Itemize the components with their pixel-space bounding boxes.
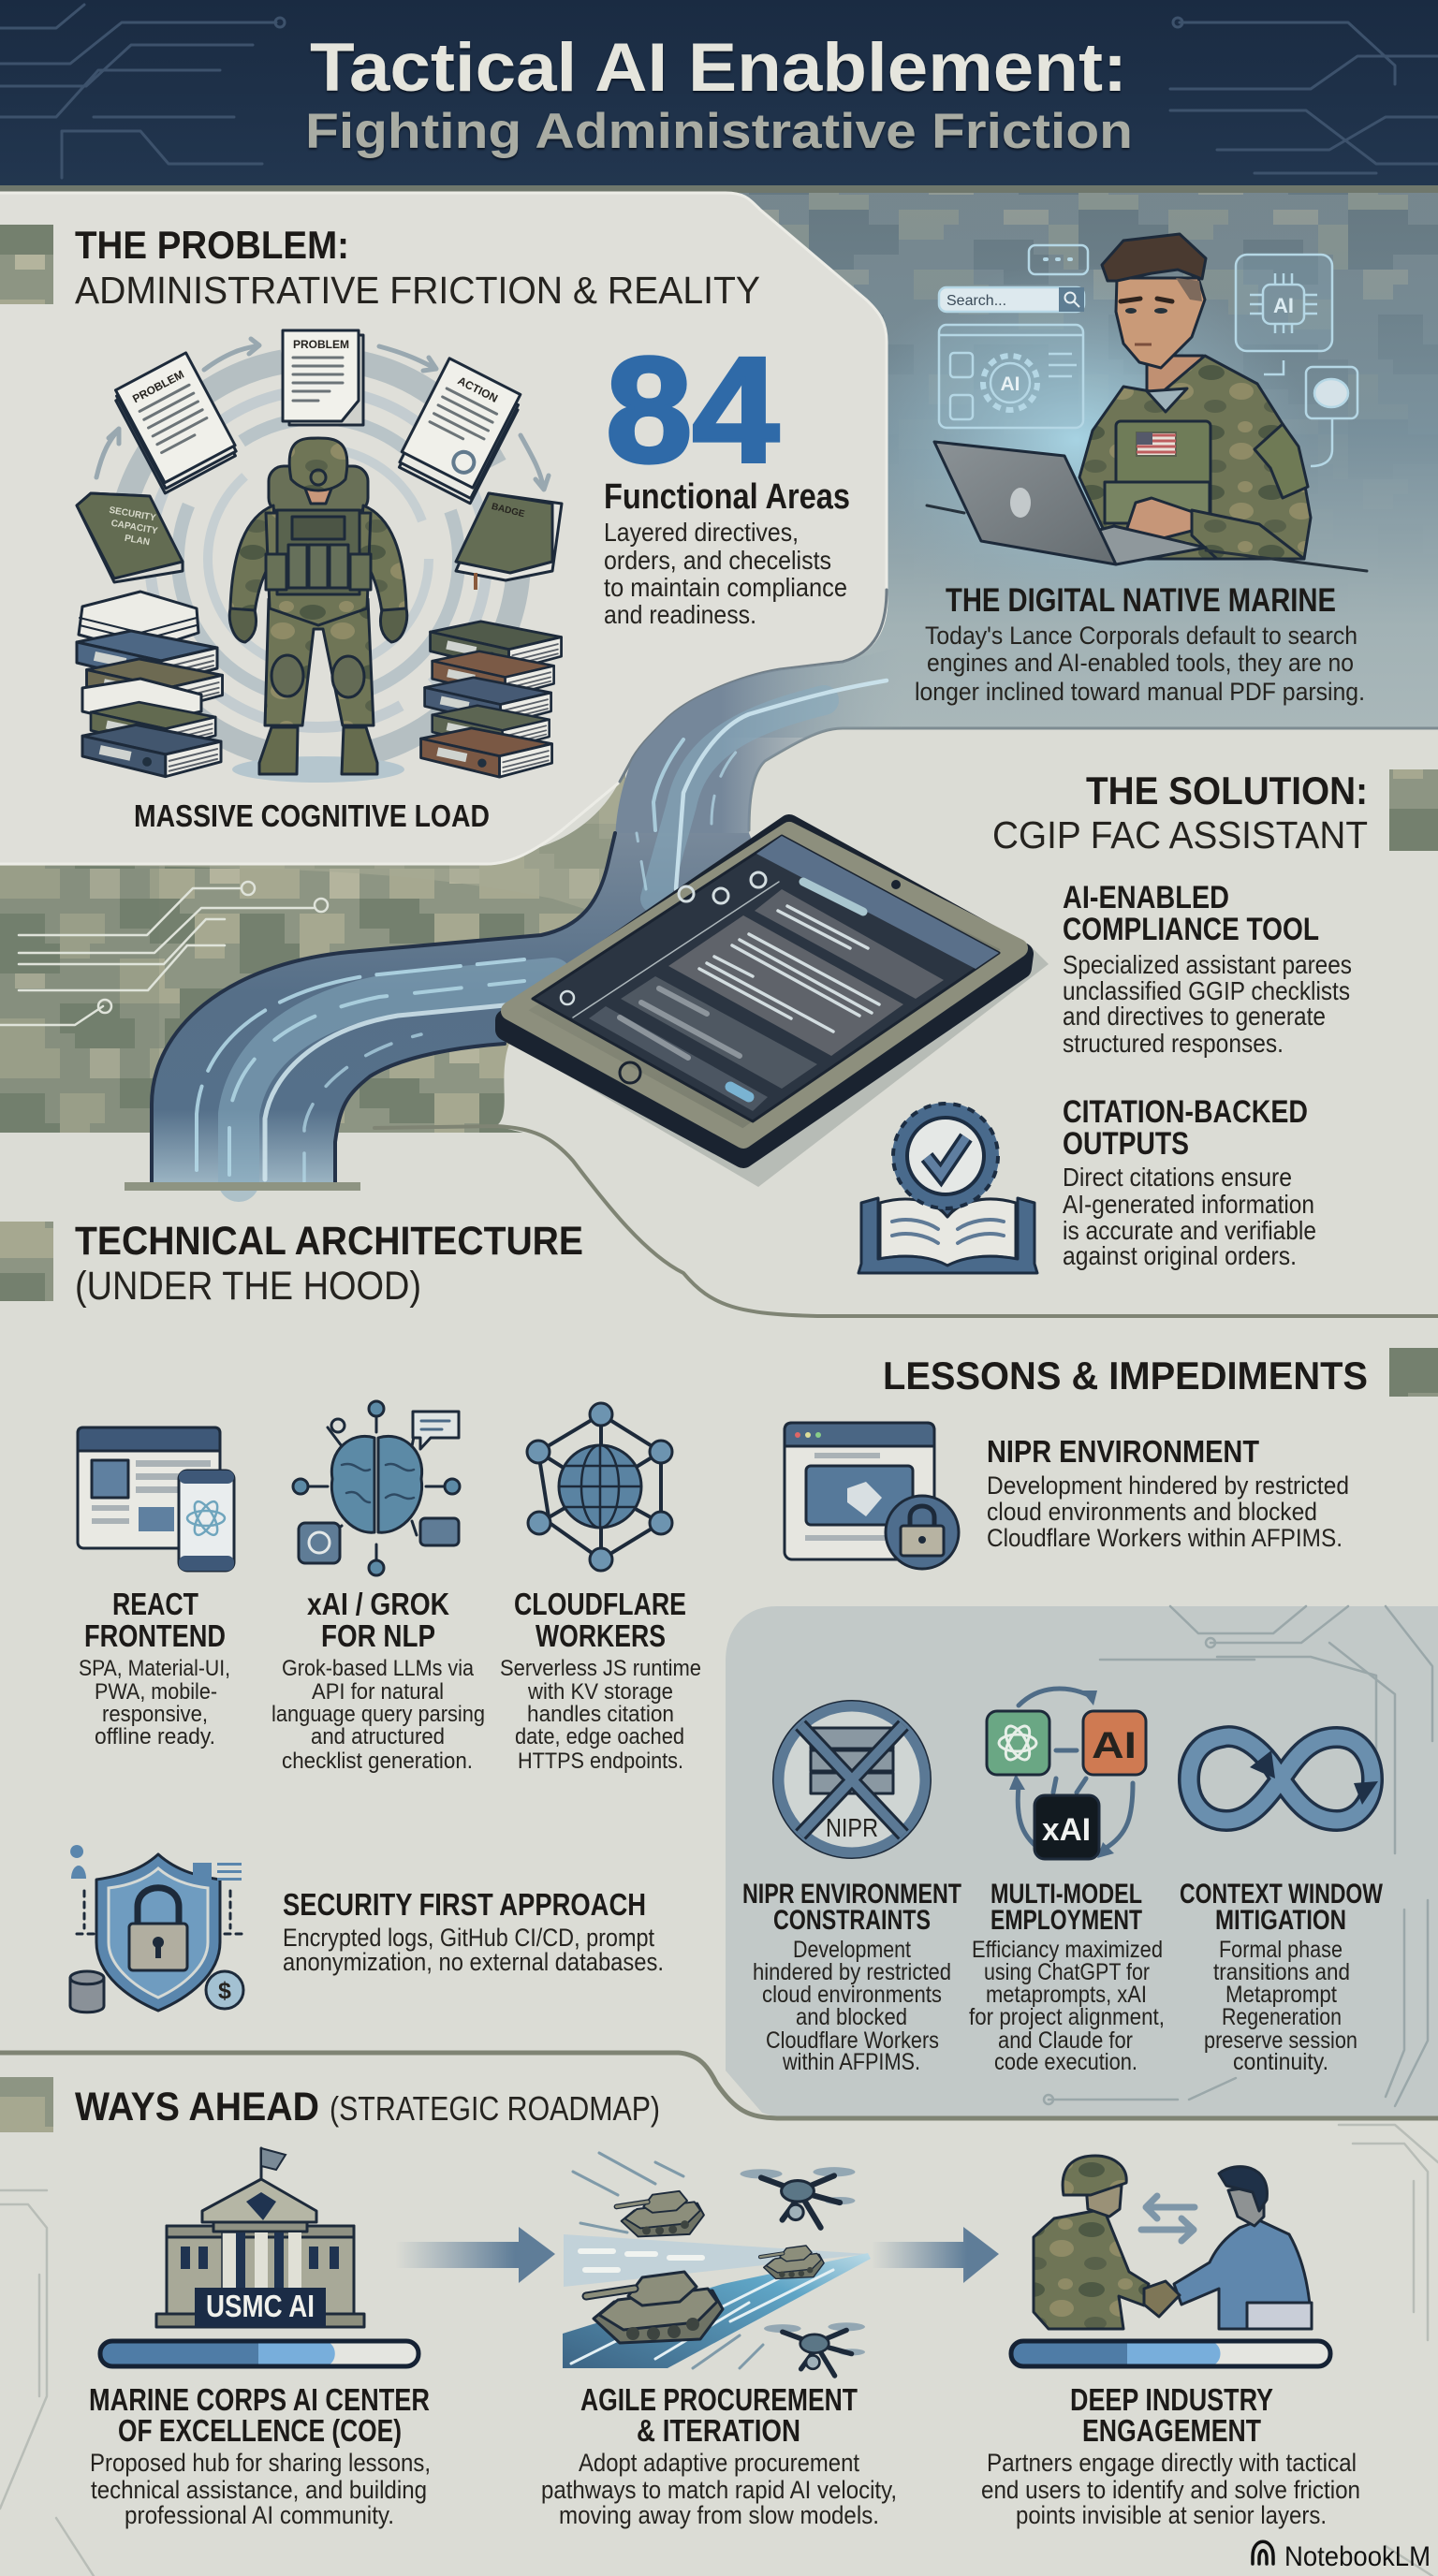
marine heading and text: longer inclined toward manual PDF parsing. — [915, 678, 1365, 706]
ways ahead heading — [0, 2077, 660, 2132]
xAI Grok text: FOR NLP — [321, 1618, 435, 1653]
multi-model employment text: Efficiancy maximized — [972, 1937, 1163, 1963]
agile procurement text: pathways to match rapid AI velocity, — [541, 2476, 897, 2504]
handshake — [1144, 2281, 1180, 2317]
ways ahead heading: WAYS AHEAD — [75, 2085, 319, 2130]
icon: citation badge on open book — [858, 1104, 1037, 1273]
context window mitigation text: Metaprompt — [1225, 1982, 1337, 2008]
center of excellence text: OF EXCELLENCE (COE) — [118, 2413, 402, 2448]
progress bar 3 — [1011, 2341, 1330, 2366]
citation-backed outputs block: against original orders. — [1063, 1241, 1297, 1270]
citation-backed outputs block: OUTPUTS — [1063, 1126, 1189, 1162]
camouflage band behind the data stream — [0, 768, 625, 1133]
center of excellence text: MARINE CORPS AI CENTER — [89, 2382, 430, 2417]
84 functional areas stat: to maintain compliance — [604, 573, 847, 602]
manuals: floating books: BADGE — [491, 502, 526, 520]
84 functional areas stat: Layered directives, — [604, 518, 799, 547]
citation-backed outputs block — [1063, 1094, 1316, 1270]
NIPR environment text: Development hindered by restricted — [987, 1471, 1349, 1500]
agile procurement text — [541, 2382, 897, 2529]
React frontend text: PWA, mobile- — [95, 1679, 217, 1705]
context window mitigation text: continuity. — [1233, 2049, 1328, 2075]
papers: flying documents: PROBLEM — [293, 338, 349, 351]
header banner — [0, 0, 1438, 193]
icon: React frontend — [78, 1427, 234, 1571]
data stream road — [125, 646, 903, 1191]
technical architecture heading — [0, 1219, 583, 1309]
context window mitigation text: Formal phase — [1219, 1937, 1343, 1963]
context window mitigation text: MITIGATION — [1215, 1905, 1346, 1936]
AI-enabled compliance tool block: and directives to generate — [1063, 1002, 1326, 1031]
context window mitigation text: CONTEXT WINDOW — [1180, 1879, 1384, 1910]
multi-model employment text: metaprompts, xAI — [986, 1982, 1147, 2008]
holographic interface panels — [939, 245, 1357, 466]
xAI Grok text: language query parsing — [271, 1702, 485, 1727]
tablet: CGIP FAC assistant — [506, 826, 1049, 1187]
AI-enabled compliance tool block: unclassified GGIP checklists — [1063, 976, 1350, 1005]
Cloudflare workers text — [500, 1587, 701, 1774]
marine heading and text: Today's Lance Corporals default to search — [925, 622, 1357, 650]
manuals: floating books: CAPACITY — [110, 519, 159, 536]
NIPR constraints text: Cloudflare Workers — [766, 2027, 939, 2054]
Cloudflare workers text: with KV storage — [527, 1679, 673, 1705]
massive cognitive load caption: MASSIVE COGNITIVE LOAD — [134, 798, 490, 833]
security first approach text: Encrypted logs, GitHub CI/CD, prompt — [283, 1924, 654, 1952]
AI-enabled compliance tool block: AI-ENABLED — [1063, 880, 1229, 915]
context window mitigation text — [1180, 1879, 1384, 2075]
center of excellence text — [89, 2382, 431, 2529]
AI-enabled compliance tool block: COMPLIANCE TOOL — [1063, 912, 1319, 947]
partner figure — [1174, 2220, 1312, 2329]
arrow 1 — [395, 2227, 555, 2283]
manuals: floating books — [77, 493, 562, 590]
exchange arrows — [1141, 2196, 1195, 2241]
84 functional areas stat — [604, 326, 850, 629]
deep industry engagement text: ENGAGEMENT — [1082, 2413, 1261, 2448]
icon: NIPR no-entry — [774, 1702, 930, 1857]
multi-model employment text: MULTI-MODEL — [990, 1879, 1142, 1910]
React frontend text: SPA, Material-UI, — [79, 1656, 230, 1681]
AI-enabled compliance tool block — [1063, 880, 1352, 1058]
digital native marine illustration — [915, 234, 1367, 706]
NIPR constraints text: within AFPIMS. — [782, 2049, 920, 2075]
agile procurement text: & ITERATION — [637, 2413, 800, 2448]
panel: lessons detail — [726, 1606, 1438, 2117]
icon: NIPR no-entry: NIPR — [826, 1813, 878, 1842]
security first approach text — [283, 1887, 664, 1976]
title: Fighting Administrative Friction — [305, 104, 1133, 159]
React frontend text: REACT — [112, 1587, 198, 1621]
icon: Cloudflare globe network — [527, 1403, 672, 1571]
xAI Grok text: xAI / GROK — [307, 1587, 449, 1621]
AI-enabled compliance tool block: Specialized assistant parees — [1063, 950, 1352, 979]
agile procurement text: moving away from slow models. — [559, 2501, 879, 2529]
React frontend text: offline ready. — [95, 1724, 215, 1749]
tablet chat cards — [561, 872, 944, 1111]
NIPR constraints text: hindered by restricted — [753, 1959, 951, 1985]
citation-backed outputs block: is accurate and verifiable — [1063, 1216, 1316, 1245]
icon: security shield: $ — [218, 1978, 231, 2004]
NIPR constraints text: CONSTRAINTS — [773, 1905, 931, 1936]
laptop — [927, 442, 1367, 571]
84 functional areas stat: orders, and checelists — [604, 546, 831, 575]
icon: USMC AI building: USMC AI — [206, 2289, 315, 2323]
xAI Grok text — [271, 1587, 485, 1774]
xAI Grok text: API for natural — [312, 1679, 444, 1705]
manuals: floating books: SECURITY — [109, 505, 157, 523]
soldier under cognitive load — [229, 438, 407, 783]
center of excellence text: professional AI community. — [125, 2501, 394, 2529]
problem heading: ADMINISTRATIVE FRICTION & REALITY — [75, 269, 760, 312]
book stacks — [77, 592, 562, 777]
center of excellence text: Proposed hub for sharing lessons, — [90, 2449, 431, 2477]
papers: flying documents — [111, 330, 524, 504]
center of excellence text: technical assistance, and building — [91, 2476, 427, 2504]
icon: NIPR locked browser — [785, 1423, 959, 1569]
NIPR environment text: Cloudflare Workers within AFPIMS. — [987, 1524, 1343, 1552]
AI-enabled compliance tool block: structured responses. — [1063, 1029, 1284, 1058]
ways ahead heading: (STRATEGIC ROADMAP) — [330, 2089, 660, 2128]
icon: multi-model cycle — [987, 1689, 1146, 1859]
solution heading: CGIP FAC ASSISTANT — [992, 813, 1368, 856]
solution heading: THE SOLUTION: — [1086, 768, 1368, 812]
deep industry engagement text: DEEP INDUSTRY — [1070, 2382, 1273, 2417]
problem heading: THE PROBLEM: — [75, 223, 349, 267]
Cloudflare workers text: handles citation — [527, 1702, 674, 1727]
manuals: floating books: PLAN — [124, 534, 151, 548]
icon: multi-model cycle: AI — [1092, 1725, 1137, 1766]
deep industry engagement text — [981, 2382, 1360, 2529]
84 functional areas stat: and readiness. — [604, 600, 756, 629]
search bar text: Search... — [946, 293, 1006, 309]
problem heading — [0, 223, 760, 312]
context window mitigation text: preserve session — [1204, 2027, 1357, 2054]
cognitive load swirl — [96, 339, 549, 759]
AI labels — [1000, 294, 1294, 395]
Cloudflare workers text: Serverless JS runtime — [500, 1656, 701, 1681]
Cloudflare workers text: WORKERS — [536, 1618, 666, 1653]
NIPR environment text — [987, 1434, 1349, 1552]
title — [305, 30, 1133, 159]
security first approach text: anonymization, no external databases. — [283, 1948, 664, 1976]
icon: security shield — [70, 1845, 243, 2012]
icon: brain network — [293, 1401, 460, 1575]
context window mitigation text: transitions and — [1213, 1959, 1350, 1985]
title: Tactical AI Enablement: — [310, 30, 1127, 106]
Cloudflare workers text: CLOUDFLARE — [514, 1587, 686, 1621]
road: main curved section — [152, 833, 753, 1188]
multi-model employment text: code execution. — [994, 2049, 1137, 2075]
technical architecture heading: TECHNICAL ARCHITECTURE — [75, 1219, 583, 1264]
marine figure — [1079, 234, 1311, 559]
icon: multi-model cycle: xAI — [1042, 1812, 1091, 1848]
NIPR constraints text: Development — [793, 1937, 911, 1963]
icon: context infinity loop — [1189, 1736, 1378, 1821]
deep industry engagement text: Partners engage directly with tactical — [987, 2449, 1357, 2477]
NIPR constraints text: cloud environments — [762, 1982, 942, 2008]
icon: agile procurement wedge — [563, 2153, 871, 2376]
arrow 2 — [872, 2227, 999, 2283]
deep industry engagement text: end users to identify and solve friction — [981, 2476, 1360, 2504]
panel: the solution — [374, 728, 1438, 1316]
multi-model employment text: and Claude for — [998, 2027, 1133, 2054]
marine heading and text — [915, 582, 1365, 706]
icon: handshake between marine and partner — [1034, 2156, 1312, 2329]
NIPR constraints text — [742, 1879, 961, 2075]
NIPR constraints text: NIPR ENVIRONMENT — [742, 1879, 961, 1910]
marine heading and text: engines and AI-enabled tools, they are no — [927, 649, 1354, 677]
solution heading — [992, 768, 1438, 856]
section: technical architecture — [0, 1219, 701, 2012]
icon: USMC AI building — [156, 2148, 364, 2327]
citation-backed outputs block: CITATION-BACKED — [1063, 1094, 1308, 1130]
xAI Grok text: checklist generation. — [282, 1749, 473, 1774]
84 functional areas stat: 84 — [606, 326, 779, 493]
xAI Grok text: and atructured — [311, 1724, 445, 1749]
papers: flying documents: PROBLEM — [130, 368, 186, 405]
xAI Grok text: Grok-based LLMs via — [282, 1656, 475, 1681]
marine heading and text: THE DIGITAL NATIVE MARINE — [946, 582, 1336, 619]
citation-backed outputs block: AI-generated information — [1063, 1190, 1314, 1219]
NIPR environment text: cloud environments and blocked — [987, 1498, 1317, 1526]
security first approach text: SECURITY FIRST APPROACH — [283, 1887, 646, 1922]
marine figure — [1034, 2209, 1149, 2329]
technical architecture heading: (UNDER THE HOOD) — [75, 1264, 421, 1309]
NIPR environment text: NIPR ENVIRONMENT — [987, 1434, 1259, 1469]
AI labels: AI — [1273, 294, 1294, 317]
84 functional areas stat: Functional Areas — [604, 477, 850, 517]
deep industry engagement text: points invisible at senior layers. — [1016, 2501, 1327, 2529]
React frontend text — [79, 1587, 230, 1749]
React frontend text: FRONTEND — [84, 1618, 226, 1653]
multi-model employment text: for project alignment, — [969, 2004, 1165, 2030]
papers: flying documents: ACTION — [456, 373, 500, 405]
panel: the problem — [0, 193, 887, 864]
progress bar 1 — [100, 2341, 418, 2366]
multi-model employment text — [969, 1879, 1165, 2075]
lessons and impediments heading: LESSONS & IMPEDIMENTS — [883, 1354, 1368, 1398]
multi-model employment text: EMPLOYMENT — [990, 1905, 1142, 1936]
section: ways ahead — [0, 2053, 1438, 2576]
agile procurement text: AGILE PROCUREMENT — [580, 2382, 858, 2417]
agile procurement text: Adopt adaptive procurement — [579, 2449, 859, 2477]
Cloudflare workers text: HTTPS endpoints. — [518, 1749, 683, 1774]
right camouflage panel: digital native marine background — [655, 185, 1438, 738]
React frontend text: responsive, — [102, 1702, 208, 1727]
Cloudflare workers text: date, edge oached — [515, 1724, 684, 1749]
AI labels: AI — [1000, 373, 1020, 395]
multi-model employment text: using ChatGPT for — [984, 1959, 1150, 1985]
context window mitigation text: Regeneration — [1222, 2004, 1342, 2030]
road: fading upper section — [615, 646, 903, 847]
citation-backed outputs block: Direct citations ensure — [1063, 1163, 1292, 1192]
NIPR constraints text: and blocked — [796, 2004, 907, 2030]
